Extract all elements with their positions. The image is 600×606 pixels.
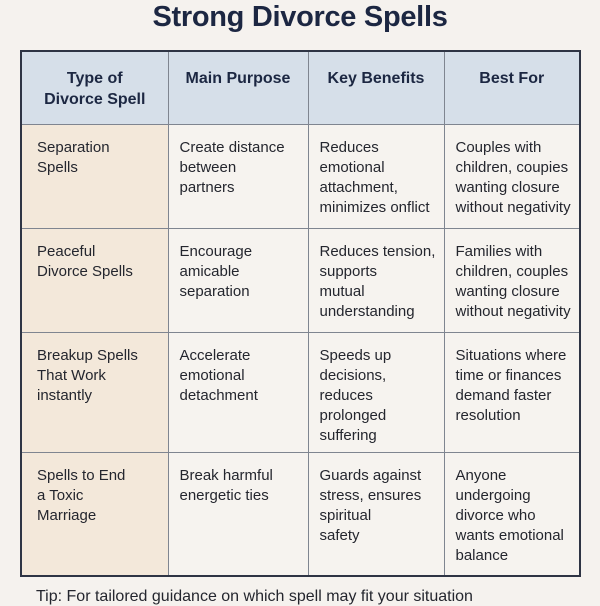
- table: Main Purpose: [186, 70, 290, 87]
- table: Guards against: [320, 467, 421, 484]
- table: wanting closure: [456, 179, 560, 196]
- table: understanding: [320, 303, 415, 320]
- table: Break harmful: [180, 467, 273, 484]
- table: time or finances: [456, 367, 561, 384]
- table: Reduces: [320, 139, 379, 156]
- table: spiritual: [320, 507, 371, 524]
- table: partners: [180, 179, 235, 196]
- table: That Work: [37, 367, 106, 384]
- table: demand faster: [456, 387, 551, 404]
- table: Encourage: [180, 243, 252, 260]
- table: Create distance: [180, 139, 285, 156]
- table: Spells to End: [37, 467, 125, 484]
- table: without negativity: [456, 303, 571, 320]
- table: emotional: [180, 367, 245, 384]
- table: Divorce Spells: [37, 263, 133, 280]
- table: emotional: [320, 159, 385, 176]
- table: Type of: [67, 70, 123, 87]
- table: amicable: [180, 263, 240, 280]
- table: wants emotional: [456, 527, 564, 544]
- table: children, couples: [456, 263, 568, 280]
- table: Key Benefits: [328, 70, 424, 87]
- table: Situations where: [456, 347, 566, 364]
- table: Separation: [37, 139, 110, 156]
- table: Anyone: [456, 467, 506, 484]
- table: Spells: [37, 159, 78, 176]
- tip text: Tip: For tailored guidance on which spell may fit your situation: [36, 588, 473, 605]
- table: Breakup Spells: [37, 347, 138, 364]
- table: Families with: [456, 243, 542, 260]
- table: a Toxic: [37, 487, 83, 504]
- table: divorce who: [456, 507, 536, 524]
- table: undergoing: [456, 487, 531, 504]
- table: reduces: [320, 387, 373, 404]
- table: balance: [456, 547, 508, 564]
- table: instantly: [37, 387, 92, 404]
- table: children, coupies: [456, 159, 568, 176]
- table: minimizes onflict: [320, 199, 430, 216]
- table: between: [180, 159, 236, 176]
- table: Best For: [479, 70, 544, 87]
- table: without negativity: [456, 199, 571, 216]
- table: stress, ensures: [320, 487, 421, 504]
- table: energetic ties: [180, 487, 269, 504]
- table: attachment,: [320, 179, 398, 196]
- table: safety: [320, 527, 360, 544]
- table: Divorce Spell: [44, 91, 145, 108]
- table: prolonged: [320, 407, 386, 424]
- table: resolution: [456, 407, 521, 424]
- table: Reduces tension,: [320, 243, 435, 260]
- table: supports: [320, 263, 377, 280]
- table: separation: [180, 283, 250, 300]
- table: Speeds up: [320, 347, 391, 364]
- table: suffering: [320, 427, 377, 444]
- table: Marriage: [37, 507, 96, 524]
- table: decisions,: [320, 367, 386, 384]
- table: Couples with: [456, 139, 541, 156]
- title: Strong Divorce Spells: [152, 1, 448, 33]
- table: Peaceful: [37, 243, 95, 260]
- table: Accelerate: [180, 347, 250, 364]
- table: mutual: [320, 283, 365, 300]
- table: wanting closure: [456, 283, 560, 300]
- table: detachment: [180, 387, 258, 404]
